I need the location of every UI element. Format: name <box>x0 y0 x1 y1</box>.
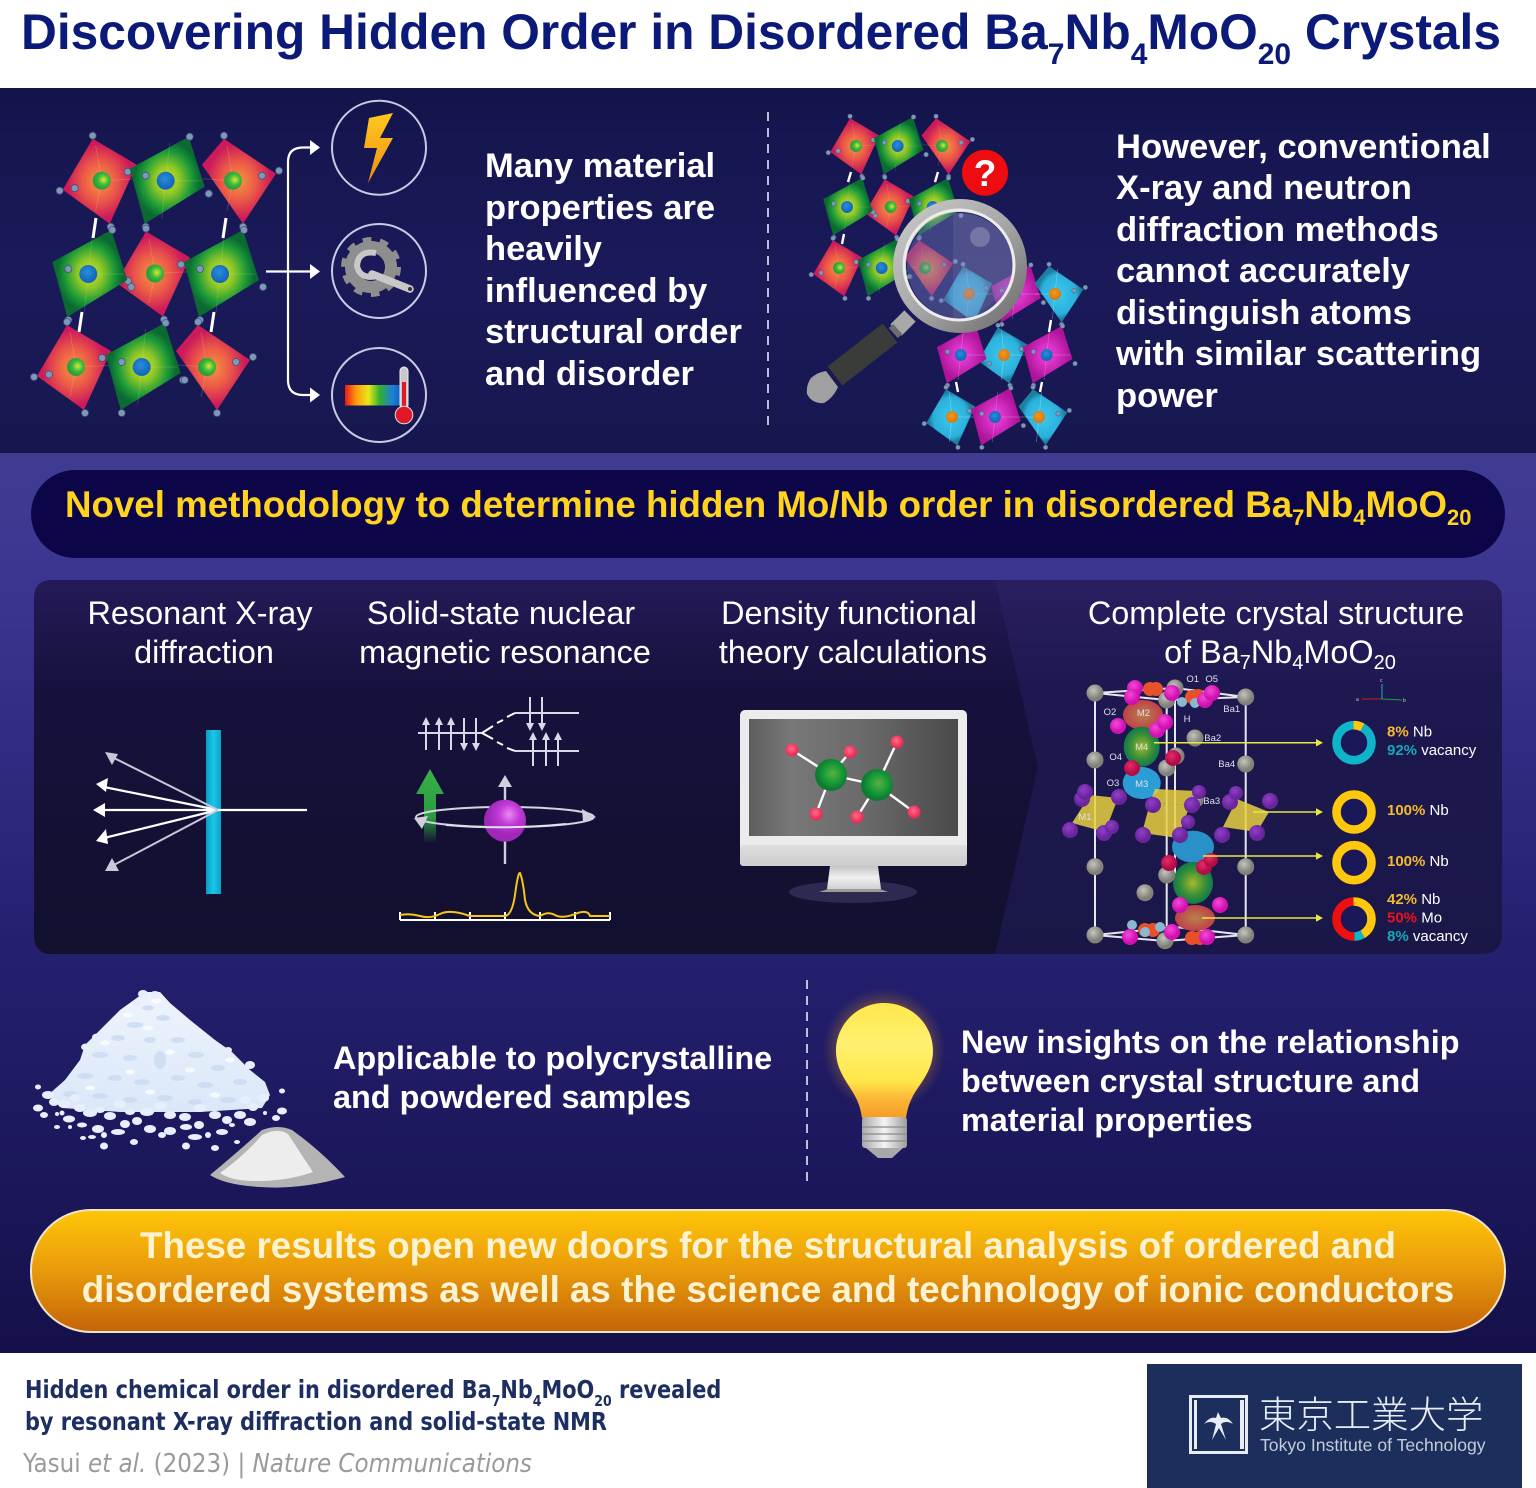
citation: Hidden chemical order in disordered Ba <box>25 1375 492 1404</box>
icon: powder pile <box>33 990 287 1151</box>
crystal structure model: M3 <box>1135 779 1148 790</box>
text: diffraction limitation: diffraction methods <box>1116 211 1439 249</box>
citation: Nb <box>500 1375 533 1404</box>
axes indicator <box>1356 678 1406 704</box>
heading: complete crystal structure: Nb <box>1251 634 1292 670</box>
axes indicator: b <box>1403 698 1406 704</box>
heading: solid-state NMR <box>359 595 651 670</box>
banner: conclusion: These results open new doors for the structural analysis of ordered and <box>140 1225 1396 1266</box>
occupancy labels: 100% Nb <box>1387 802 1449 819</box>
text: structural order statement: and disorder <box>485 355 694 393</box>
heading: complete crystal structure: 7 <box>1240 652 1251 674</box>
citation: Yasui et al. (2023) | Nature Communications <box>22 1449 532 1479</box>
title: 20 <box>1258 38 1291 71</box>
occupancy labels: 100% Nb <box>1387 853 1449 870</box>
crystal structure model: Ba3 <box>1203 796 1220 807</box>
title: Crystals <box>1291 4 1501 60</box>
citation <box>22 1375 721 1479</box>
text: new insights: between crystal structure and <box>961 1063 1420 1099</box>
text: diffraction limitation: cannot accurately <box>1116 252 1411 290</box>
axes indicator: a <box>1356 697 1359 703</box>
text: applicable to samples: and powdered samples <box>333 1079 691 1115</box>
banner: novel methodology: Nb <box>1304 484 1353 525</box>
text: diffraction limitation <box>1115 128 1491 415</box>
arrows: branching to properties <box>266 140 320 402</box>
crystal structure model: O4 <box>1109 752 1122 763</box>
banner: conclusion <box>31 1210 1505 1332</box>
citation: by resonant X-ray diffraction and solid-state NMR <box>25 1407 607 1436</box>
heading: solid-state NMR: magnetic resonance <box>359 634 651 670</box>
banner: novel methodology: Novel methodology to determine hidden Mo/Nb order in disordered Ba <box>65 484 1292 525</box>
citation: 7 <box>492 1394 500 1410</box>
citation: MoO <box>541 1375 594 1404</box>
heading: complete crystal structure: 4 <box>1292 652 1303 674</box>
banner: novel methodology: MoO <box>1366 484 1447 525</box>
heading: resonant X-ray diffraction: diffraction <box>134 634 274 670</box>
crystal structure model: O5 <box>1205 674 1218 685</box>
heading: complete crystal structure: MoO <box>1303 634 1374 670</box>
crystal structure model: O3 <box>1107 778 1119 789</box>
citation: revealed <box>612 1375 721 1404</box>
heading: DFT: theory calculations <box>719 634 987 670</box>
panel: top section background <box>0 88 1536 453</box>
banner: novel methodology: 7 <box>1292 505 1304 530</box>
donut: M3 site occupancy <box>1336 845 1372 880</box>
heading: resonant X-ray diffraction <box>87 595 313 670</box>
icon: question mark <box>962 150 1008 196</box>
text: diffraction limitation: with similar scattering <box>1115 335 1481 373</box>
text: structural order statement: heavily <box>485 230 602 268</box>
banner: conclusion: disordered systems as well as the science and technology of ionic conductors <box>82 1269 1454 1310</box>
title: Nb <box>1064 4 1131 60</box>
occupancy labels: 8% Nb <box>1387 724 1432 740</box>
heading: DFT <box>719 595 987 670</box>
footer band <box>0 1353 1536 1488</box>
text: new insights: material properties <box>961 1102 1253 1138</box>
heading: complete crystal structure: Complete crystal structure <box>1088 595 1464 631</box>
crystal lattice: ordered octahedra <box>30 132 282 416</box>
text: diffraction limitation: X-ray and neutron <box>1116 169 1412 207</box>
text: applicable to samples: Applicable to polycrystalline <box>333 1040 772 1076</box>
icon: X-ray diffraction diagram <box>93 730 307 894</box>
icon: NMR diagram <box>400 697 610 920</box>
occupancy labels: 50% Mo <box>1387 910 1442 926</box>
heading: complete crystal structure: of Ba <box>1164 634 1240 670</box>
citation: 4 <box>533 1394 541 1410</box>
title: 4 <box>1131 38 1148 71</box>
text: structural order statement: influenced by <box>485 272 707 310</box>
occupancy labels: 42% Nb <box>1387 891 1440 908</box>
heading: complete crystal structure <box>1088 595 1464 674</box>
text: new insights: New insights on the relationship <box>961 1024 1460 1060</box>
text: new insights <box>961 1024 1460 1138</box>
text: structural order statement: Many material <box>485 147 715 185</box>
crystal structure model: O1 <box>1186 674 1199 685</box>
occupancy labels <box>1387 724 1477 945</box>
banner: novel methodology: 4 <box>1353 505 1366 530</box>
heading: solid-state NMR: Solid-state nuclear <box>367 595 635 631</box>
text: diffraction limitation: However, conventional <box>1116 128 1491 166</box>
citation: 20 <box>594 1394 612 1410</box>
crystal lattice under magnifier <box>809 114 1088 450</box>
donut: M1 site occupancy <box>1336 794 1372 830</box>
banner: novel methodology <box>31 470 1505 558</box>
heading: DFT: Density functional <box>721 595 977 631</box>
icon: white powder cone <box>210 1127 345 1188</box>
text: structural order statement: structural order <box>485 313 742 351</box>
title: Discovering Hidden Order in Disordered Ba <box>21 4 1048 60</box>
heading: resonant X-ray diffraction: Resonant X-ray <box>87 595 313 631</box>
text: diffraction limitation: power <box>1116 377 1218 415</box>
heading: complete crystal structure: 20 <box>1374 652 1396 674</box>
donut: M4 site occupancy <box>1336 725 1372 760</box>
crystal structure model: M2 <box>1137 708 1150 719</box>
panel: middle section background <box>0 453 1536 1353</box>
logo: Tokyo Institute of Technology: Tokyo Institute of Technology <box>1260 1435 1486 1455</box>
icon: magnifying glass <box>807 206 1020 403</box>
logo: Tokyo Institute of Technology: 東京工業大学 <box>1259 1385 1483 1439</box>
icon: light bulb <box>822 988 946 1158</box>
text: structural order statement: properties are <box>485 189 715 227</box>
title: MoO <box>1147 4 1258 60</box>
title: 7 <box>1048 38 1064 71</box>
callout arrows to occupancies <box>1154 739 1323 922</box>
text: applicable to samples <box>333 1040 772 1115</box>
text: diffraction limitation: distinguish atoms <box>1116 294 1412 332</box>
crystal structure model: M1 <box>1078 812 1092 823</box>
crystal structure model: Ba2 <box>1204 733 1221 744</box>
icon: gear and wrench <box>332 224 426 318</box>
icon: electricity <box>332 101 426 195</box>
donut: M2 site occupancy <box>1336 902 1372 936</box>
text: structural order statement <box>485 147 742 393</box>
crystal structure model: H <box>1184 714 1191 725</box>
icon: question mark: ? <box>974 153 996 194</box>
crystal structure model: Ba4 <box>1218 759 1235 770</box>
icon: temperature spectrum <box>332 348 426 442</box>
crystal structure model <box>1062 674 1278 949</box>
crystal structure model: M4 <box>1135 742 1148 753</box>
icon: computer monitor with molecule <box>740 710 967 903</box>
crystal structure model: Ba1 <box>1223 704 1240 715</box>
occupancy labels: 92% vacancy <box>1387 742 1477 759</box>
crystal structure model: O2 <box>1104 707 1116 718</box>
logo: Tokyo Institute of Technology <box>1147 1364 1522 1488</box>
banner: novel methodology: 20 <box>1447 505 1472 530</box>
occupancy labels: 8% vacancy <box>1387 928 1468 945</box>
axes indicator: c <box>1380 678 1383 684</box>
panel: methods <box>34 580 1502 954</box>
